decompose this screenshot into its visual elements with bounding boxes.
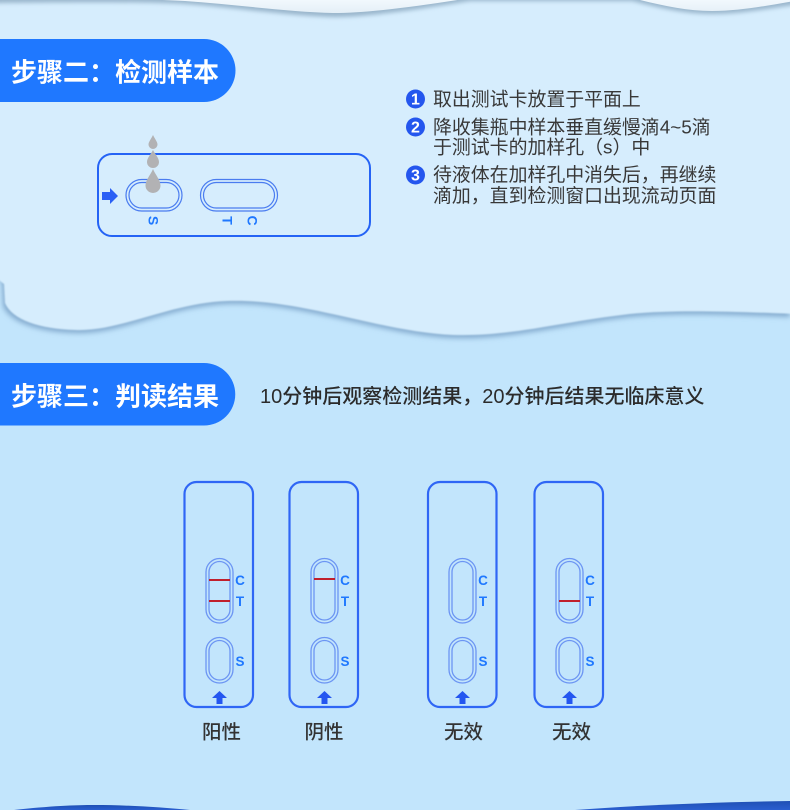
- result card: negative: S: [340, 654, 350, 669]
- label: invalid 1: 无效: [444, 722, 483, 744]
- bottom dark wave right: [575, 801, 790, 810]
- result card: positive: C: [235, 573, 245, 588]
- bottom dark wave left: [14, 805, 190, 810]
- label: positive: 阳性: [202, 722, 241, 744]
- rotated labels: S: [146, 216, 162, 225]
- result card: invalid 2: T: [586, 594, 595, 609]
- label: invalid 2: 无效: [552, 722, 591, 744]
- result card: positive: S: [235, 654, 245, 669]
- item 2: 降收集瓶中样本垂直缓慢滴4~5滴: [433, 116, 711, 138]
- sample well S: [126, 180, 182, 211]
- result window: [200, 180, 278, 211]
- test card: sample drop diagram: T: [220, 216, 236, 225]
- heading: step 3: [0, 363, 235, 426]
- item 1: 1: [411, 92, 420, 108]
- result card: invalid 2: S: [585, 654, 595, 669]
- result card: positive: T: [236, 594, 245, 609]
- heading: step 2: [0, 39, 236, 102]
- result card: invalid 1: S: [478, 654, 488, 669]
- label: negative: 阴性: [304, 722, 344, 744]
- heading: step 3: 步骤三：判读结果: [11, 382, 219, 412]
- result card: invalid 1: [428, 482, 496, 707]
- drops: [146, 135, 160, 193]
- item 2: 于测试卡的加样孔（s）中: [433, 136, 650, 158]
- result card: invalid 2: C: [585, 573, 595, 588]
- instructions list: [406, 88, 716, 207]
- result card: invalid 1: C: [478, 573, 488, 588]
- result card: invalid 2: [534, 482, 603, 707]
- heading: step 2: 步骤二：检测样本: [11, 58, 219, 88]
- test card: sample drop diagram: C: [244, 215, 260, 226]
- item 2: 2: [411, 120, 420, 136]
- item 3: 3: [411, 168, 420, 184]
- step 3 note: 10分钟后观察检测结果，20分钟后结果无临床意义: [260, 385, 704, 408]
- result card: negative: C: [340, 573, 350, 588]
- result card: invalid 1: T: [479, 594, 488, 609]
- item 3: 待液体在加样孔中消失后，再继续: [433, 164, 716, 186]
- result card: negative: [290, 482, 358, 707]
- item 3: [406, 164, 716, 207]
- item 2: [406, 116, 711, 158]
- background: upper wavy panel: [0, 0, 790, 338]
- item 3: 滴加，直到检测窗口出现流动页面: [433, 185, 716, 207]
- test card: sample drop diagram: [98, 135, 370, 236]
- result card: positive: [184, 482, 253, 707]
- result card: negative: T: [341, 594, 350, 609]
- item 1: 取出测试卡放置于平面上: [433, 88, 641, 110]
- top white wave: [0, 0, 790, 17]
- arrow right: [102, 188, 118, 204]
